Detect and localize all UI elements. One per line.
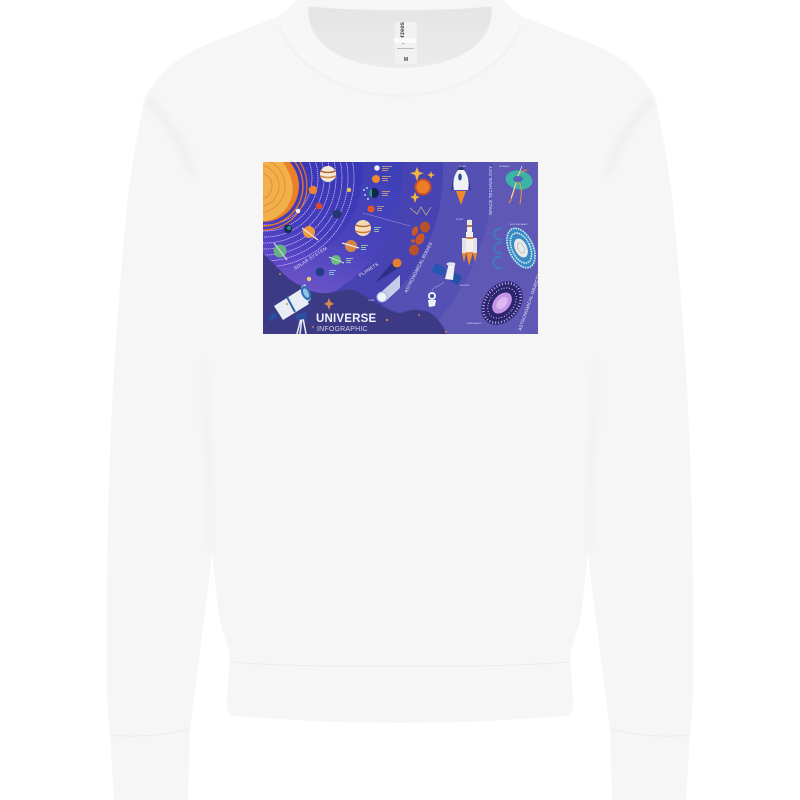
- sleeve crease right: [588, 360, 597, 552]
- band: planets: [279, 162, 403, 294]
- white moon: [296, 209, 300, 213]
- sparkle stars: [410, 167, 424, 181]
- planets: solar system: [274, 166, 351, 260]
- back neck rim: [299, 0, 501, 10]
- heading: [316, 313, 377, 333]
- sleeve crease left: [203, 360, 212, 552]
- band labels: SOLAR SYSTEM: [293, 246, 328, 271]
- collar band: [277, 0, 523, 92]
- uranus: [329, 255, 344, 265]
- garment body and sleeves: [107, 0, 693, 800]
- collar seam: [280, 26, 520, 96]
- right cuff seam: [611, 729, 690, 736]
- jupiter: [320, 166, 336, 182]
- tiny captions: SPIRAL GALAXY: [467, 322, 482, 325]
- mars: [368, 206, 374, 212]
- mercury white: [374, 165, 380, 171]
- star sun: [414, 178, 432, 196]
- heading: INFOGRAPHIC: [317, 326, 368, 333]
- sun: [263, 162, 308, 231]
- band labels: PLANETS: [358, 261, 380, 278]
- bottom dark hill: [263, 253, 447, 334]
- band labels: ASTRONOMICAL OBJECTS: [517, 273, 541, 331]
- tiny captions: SATELLITE: [460, 284, 470, 287]
- planets band: [307, 165, 410, 281]
- left cuff seam: [110, 729, 189, 736]
- wormhole: [504, 166, 534, 204]
- red: [316, 203, 322, 209]
- dwarf planet divider line: [363, 213, 410, 226]
- neck label: Jerzees: [400, 21, 406, 44]
- jupiter: [355, 220, 371, 236]
- mars orange: [309, 186, 317, 194]
- venus: [372, 175, 380, 183]
- back neck interior: [297, 0, 503, 75]
- comet: [377, 275, 400, 302]
- tiny captions: ELLIPTICAL GALAXY: [510, 223, 528, 226]
- planet captions: [377, 166, 392, 211]
- asteroids: [409, 222, 430, 256]
- constellation: [410, 207, 431, 215]
- tiny captions: ROCKET: [456, 219, 464, 221]
- tiny captions: WORMHOLE: [499, 166, 511, 168]
- rocket tall: [462, 219, 477, 266]
- tiny captions: [368, 166, 528, 325]
- band: astronomical bodies: [334, 162, 443, 306]
- earth and moons: [363, 187, 379, 200]
- spiral galaxy: [473, 273, 531, 333]
- telescope: [268, 284, 313, 334]
- neck label: M: [404, 57, 408, 63]
- band labels: [293, 166, 541, 331]
- satellite: [432, 262, 462, 285]
- printed infographic: [263, 162, 538, 334]
- tiny captions: ROCKET: [459, 166, 467, 168]
- heading: UNIVERSE: [316, 313, 377, 325]
- decorative stars: [279, 273, 447, 333]
- armhole seam left: [147, 98, 192, 175]
- astronomical bodies: [375, 167, 435, 302]
- band: solar system: [291, 162, 363, 199]
- pluto: [307, 277, 311, 281]
- small gauge rings: [493, 228, 502, 268]
- yellow: [347, 188, 351, 192]
- band labels: ASTRONOMICAL BODIES: [403, 241, 433, 293]
- armhole seam right: [608, 98, 653, 175]
- neptune: [316, 268, 324, 276]
- orbits: [263, 162, 354, 266]
- astronaut: [428, 282, 444, 307]
- saturn: [302, 226, 318, 240]
- tiny captions: COMET: [368, 300, 375, 302]
- band: space technology: [382, 162, 493, 320]
- uranus green: [274, 243, 287, 260]
- meteor: [375, 258, 402, 283]
- elliptical galaxy: [500, 223, 542, 273]
- background: outermost band: [438, 162, 538, 334]
- saturn: [342, 240, 359, 252]
- sweatshirt: [107, 0, 693, 800]
- earth dark: [284, 225, 292, 233]
- band labels: SPACE TECHNOLOGY: [488, 166, 493, 215]
- neck label: [394, 21, 417, 64]
- neptune: [332, 210, 342, 218]
- hem rib seam: [231, 662, 569, 666]
- rocket top: [451, 165, 471, 205]
